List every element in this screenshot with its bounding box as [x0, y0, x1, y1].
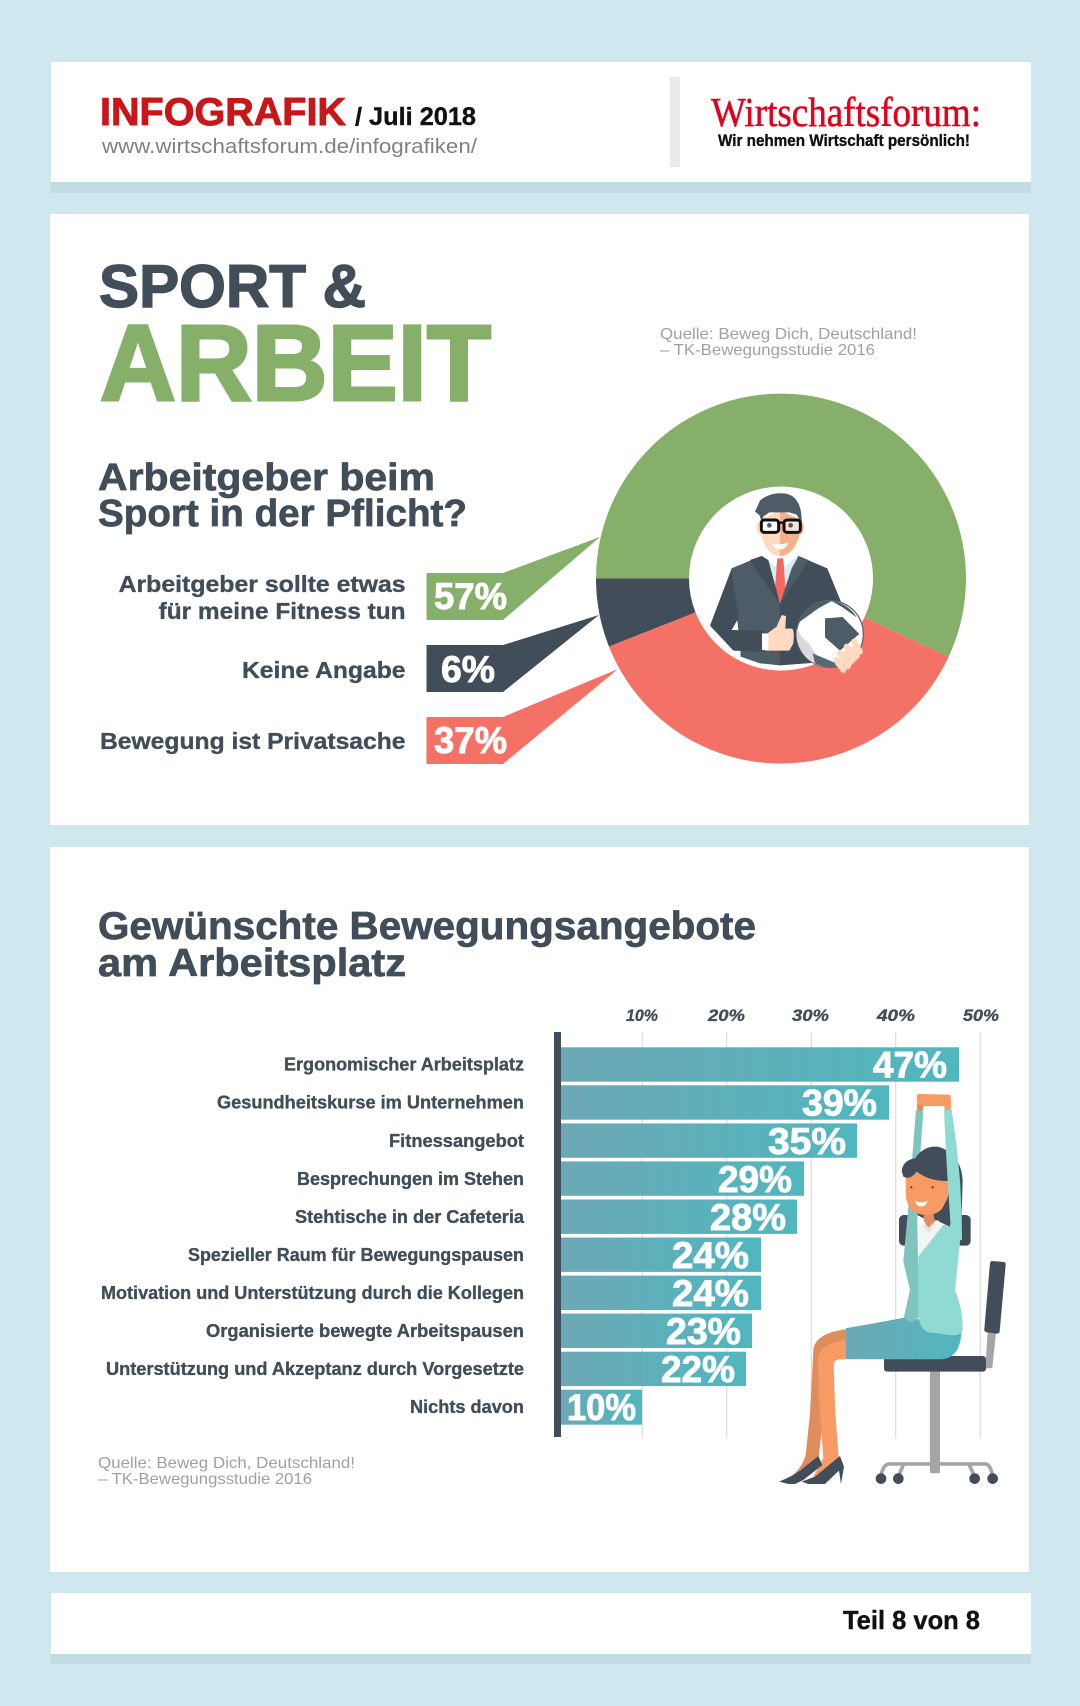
axis labels: 40% [876, 1006, 915, 1025]
callout: 57 percent: 57% [434, 576, 507, 617]
callout: 57 percent [119, 537, 600, 624]
bar values: 10% [567, 1387, 636, 1428]
logo tagline: Wir nehmen Wirtschaft persönlich! [718, 131, 970, 150]
date: / Juli 2018 [355, 103, 476, 131]
section heading: Gewünschte Bewegungsangebote [98, 905, 756, 948]
bar labels: Unterstützung und Akzeptanz durch Vorgesetzte [106, 1359, 524, 1379]
callout: 57 percent: Arbeitgeber sollte etwas [119, 571, 406, 597]
bar labels: Motivation und Unterstützung durch die Kollegen [101, 1283, 524, 1303]
subheading: Arbeitgeber beim [98, 457, 435, 499]
source note: – TK-Bewegungsstudie 2016 [660, 342, 875, 359]
heading: Infografik: INFOGRAFIK [100, 91, 346, 134]
icon: woman stretching on office chair [779, 1094, 1006, 1484]
bar values: 28% [710, 1197, 786, 1238]
title line: Arbeit: ARBEIT [100, 302, 491, 423]
url: www.wirtschaftsforum.de/infografiken/ [101, 136, 477, 158]
bar labels: Spezieller Raum für Bewegungspausen [188, 1245, 524, 1265]
bar labels: Gesundheitskurse im Unternehmen [217, 1093, 524, 1113]
panel: Bewegungsangebote [50, 847, 1029, 1572]
source note: Quelle: Beweg Dich, Deutschland! [98, 1455, 355, 1472]
bar values: 24% [672, 1235, 749, 1276]
source note: Quelle: Beweg Dich, Deutschland! [660, 326, 917, 343]
callout: 6 percent [242, 615, 599, 692]
subheading [98, 457, 467, 535]
icon: businessman with football [710, 493, 863, 670]
source note [660, 326, 917, 359]
callout: 37 percent [100, 669, 618, 764]
title line: Sport &: SPORT & [99, 253, 366, 320]
callout: 37 percent: 37% [434, 720, 507, 761]
bar values: 35% [768, 1121, 846, 1162]
section heading [98, 905, 756, 985]
bar values: 23% [666, 1311, 741, 1352]
donut chart [596, 394, 966, 764]
axis labels: 30% [792, 1006, 829, 1025]
source note: – TK-Bewegungsstudie 2016 [98, 1471, 312, 1488]
panel: header [51, 62, 1031, 193]
logo: Wirtschaftsforum: Wirtschaftsforum: [711, 89, 981, 135]
bar values [567, 1045, 947, 1428]
subheading: Sport in der Pflicht? [98, 493, 467, 535]
bars [561, 1047, 959, 1425]
page indicator: Teil 8 von 8 [843, 1605, 980, 1635]
callout: 6 percent: 6% [441, 649, 495, 690]
source note [98, 1455, 355, 1488]
panel: Sport und Arbeit [50, 214, 1029, 825]
callout: 57 percent: für meine Fitness tun [159, 598, 406, 624]
section heading: am Arbeitsplatz [98, 942, 406, 985]
panel: footer [51, 1593, 1031, 1664]
bar labels: Stehtische in der Cafeteria [295, 1207, 525, 1227]
axis labels: 50% [963, 1006, 999, 1025]
bar values: 39% [802, 1083, 877, 1124]
bar labels: Besprechungen im Stehen [297, 1169, 524, 1189]
axis labels: 10% [626, 1006, 658, 1025]
bar labels: Nichts davon [410, 1397, 524, 1417]
bar values: 47% [873, 1045, 947, 1086]
callout: 6 percent: Keine Angabe [242, 657, 406, 683]
bar chart [101, 1006, 999, 1438]
callout: 37 percent: Bewegung ist Privatsache [100, 728, 406, 754]
axis labels: 20% [707, 1006, 745, 1025]
bar labels: Fitnessangebot [389, 1131, 524, 1151]
bar values: 22% [661, 1349, 735, 1390]
bar values: 24% [672, 1273, 749, 1314]
bar labels: Ergonomischer Arbeitsplatz [284, 1055, 524, 1075]
bar values: 29% [718, 1159, 792, 1200]
bar labels: Organisierte bewegte Arbeitspausen [206, 1321, 524, 1341]
axis labels [626, 1006, 999, 1025]
bar labels [101, 1055, 525, 1417]
